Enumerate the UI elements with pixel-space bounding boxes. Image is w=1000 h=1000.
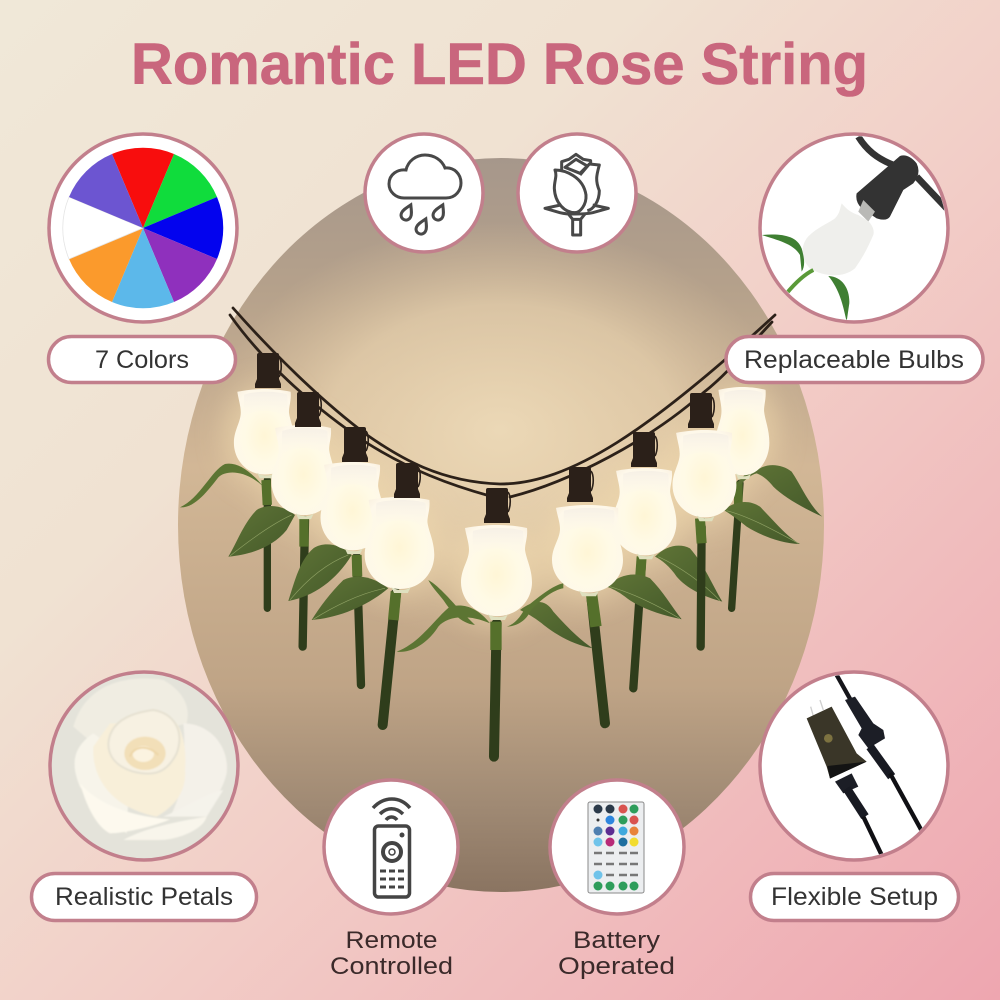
panel: replaceable bulbs — [726, 134, 983, 382]
panel: battery operated — [550, 780, 684, 980]
rose 5 — [397, 488, 532, 757]
label: remote controlled: Remote — [346, 927, 438, 954]
central wall panel — [178, 158, 824, 892]
color wheel icon — [49, 134, 237, 322]
label: replaceable bulbs: Replaceable Bulbs — [744, 346, 964, 374]
photo: white rose — [50, 672, 238, 860]
icon: rose — [545, 154, 608, 235]
rose 9 — [715, 387, 822, 608]
label: realistic petals: Realistic Petals — [55, 883, 233, 911]
panel: realistic petals — [32, 672, 256, 920]
label: flexible setup: Flexible Setup — [771, 883, 938, 911]
panel: weatherproof — [365, 134, 483, 252]
label: battery operated: Operated — [558, 953, 675, 980]
panel: rose shape — [518, 134, 636, 252]
panel: flexible setup — [750, 672, 958, 920]
rose 6 — [507, 467, 682, 723]
rose 1 — [180, 353, 295, 608]
label: remote controlled: Controlled — [330, 953, 453, 980]
title: Romantic LED Rose String — [131, 32, 868, 97]
rose 4 — [312, 463, 475, 725]
icon: rain cloud — [389, 155, 461, 236]
rose 3 — [288, 427, 384, 685]
label: realistic petals — [32, 874, 256, 920]
label: 7 colors: 7 Colors — [95, 346, 189, 374]
label: 7 colors — [48, 336, 236, 382]
photo: bulb and socket — [760, 134, 948, 322]
label: battery operated: Battery — [573, 927, 660, 954]
photo: power adapter and cable — [760, 672, 948, 860]
label: replaceable bulbs — [726, 336, 983, 382]
photo: remote control — [588, 802, 644, 893]
bulb halos — [224, 382, 778, 625]
panel: 7 colors — [48, 134, 237, 382]
rose 8 — [672, 393, 800, 647]
rose 7 — [612, 432, 722, 688]
icon: remote — [373, 799, 410, 897]
wires — [230, 308, 775, 497]
panel: remote controlled — [324, 780, 458, 980]
label: flexible setup — [750, 874, 958, 920]
rose 2 — [228, 392, 335, 647]
rose string light illustration — [180, 308, 822, 757]
